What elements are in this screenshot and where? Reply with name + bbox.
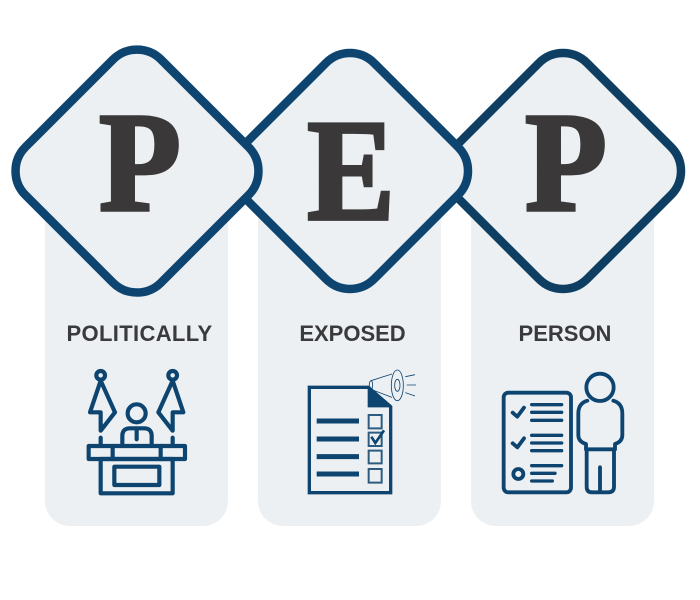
panel: exposed card (258, 180, 441, 526)
heading: person: PERSON (519, 321, 611, 346)
panel: person card (471, 180, 654, 526)
panel: politically card (45, 180, 228, 526)
diamond: first letter P: P (99, 83, 181, 241)
diamond: first letter P (1, 36, 273, 307)
icon: person beside checklist (504, 374, 622, 492)
icon: politician at podium with flags (89, 371, 185, 493)
heading: politically: POLITICALLY (66, 321, 213, 346)
diamond: letter E: E (307, 90, 395, 250)
diamond: third letter P (431, 39, 695, 303)
diamond: third letter P: P (525, 83, 607, 241)
icon: checklist document with megaphone (309, 370, 416, 493)
diamond: letter E (218, 39, 482, 303)
heading: exposed: EXPOSED (299, 321, 406, 346)
